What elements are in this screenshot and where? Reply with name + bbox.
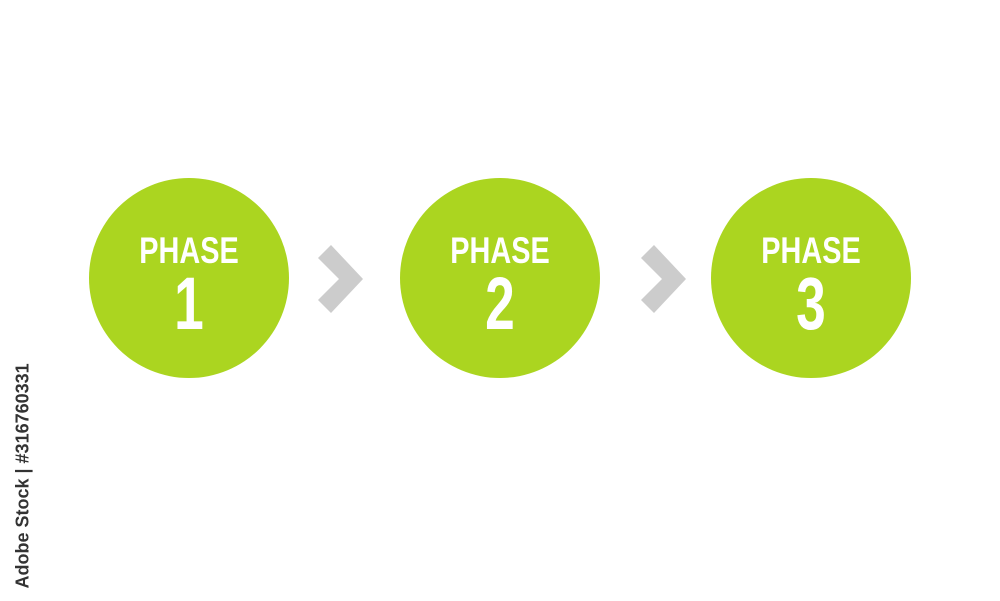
number: 1: 1 xyxy=(174,262,204,345)
label: phase 3: PHASE xyxy=(761,230,861,271)
label: phase 1: PHASE xyxy=(139,230,239,271)
circle: phase 1 xyxy=(89,178,289,378)
label: phase 2: PHASE xyxy=(450,230,550,271)
number: 2: 2 xyxy=(485,262,515,345)
watermark text: Adobe Stock | #316760331 xyxy=(12,363,32,588)
circle: phase 3 xyxy=(711,178,911,378)
number: 3: 3 xyxy=(796,262,826,345)
circle: phase 2 xyxy=(400,178,600,378)
